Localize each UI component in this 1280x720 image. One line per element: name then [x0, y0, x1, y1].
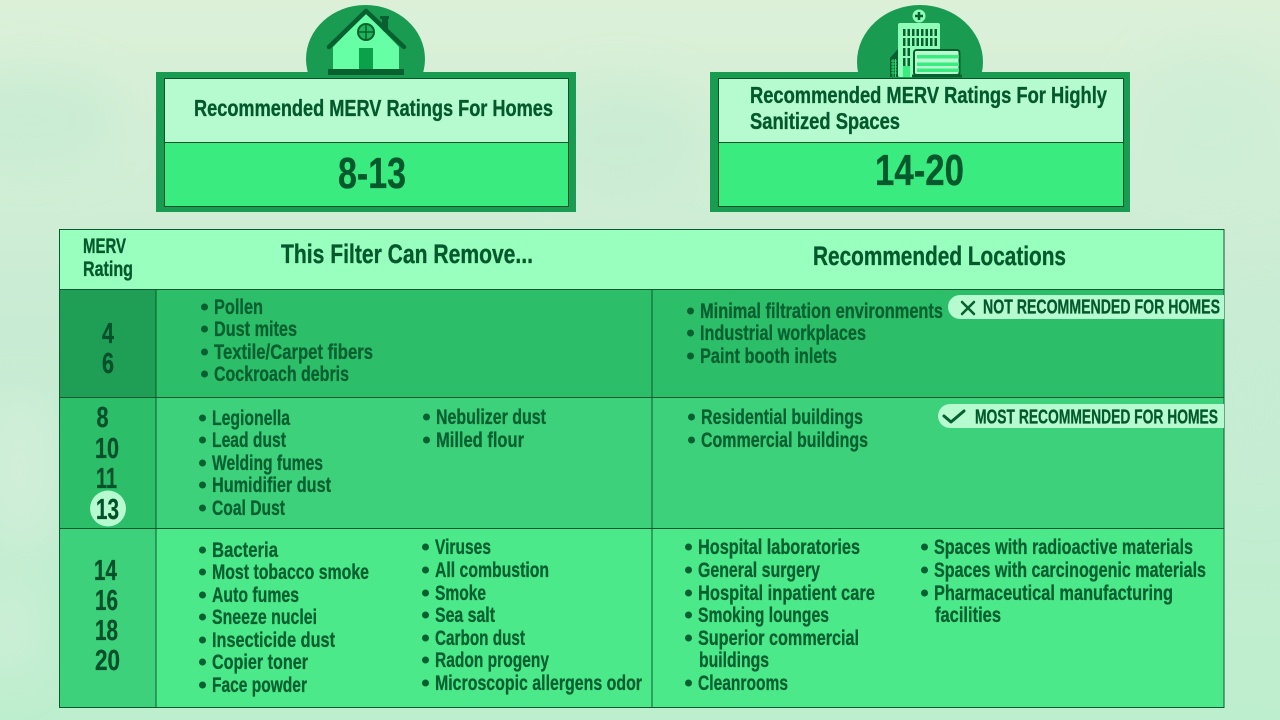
icon: check mark [944, 411, 964, 422]
list: row 3 locations: facilities [935, 603, 1001, 627]
list: row 1 contaminants: Cockroach debris [214, 362, 349, 386]
list: row 3 contaminants: Sneeze nuclei [212, 605, 317, 629]
list: row 2 locations [688, 405, 868, 452]
list: row 3 contaminants: Smoke [435, 581, 486, 605]
list: row 2 contaminants: Coal Dust [212, 496, 285, 520]
list: row 3 locations [685, 535, 1206, 695]
list: row 2 contaminants: Humidifier dust [212, 473, 331, 497]
card heading: sanitized spaces: Sanitized Spaces [750, 108, 900, 134]
list: row 3 locations: Spaces with radioactive materials [934, 535, 1193, 559]
MERV ratings: 8 to 13 [90, 402, 126, 526]
list: row 1 locations: Industrial workplaces [700, 321, 866, 345]
highlight: 13 circle [90, 490, 126, 526]
card heading: homes: Recommended MERV Ratings For Homes [194, 95, 553, 121]
column heading: filter removes: This Filter Can Remove... [281, 239, 533, 269]
list: row 3 contaminants: Sea salt [435, 603, 495, 627]
MERV ratings: 14 to 20: 14 [94, 555, 117, 587]
list: row 3 contaminants: Copier toner [212, 650, 308, 674]
icon: hospital [857, 5, 983, 78]
list: row 3 locations: Hospital laboratories [698, 535, 860, 559]
list: row 2 contaminants: Legionella [212, 406, 291, 430]
column heading: MERV rating: MERV [83, 235, 126, 258]
list: row 1 contaminants: Textile/Carpet fibers [214, 340, 373, 364]
MERV ratings: 14 to 20: 18 [95, 615, 118, 647]
list: row 3 contaminants: Carbon dust [435, 626, 525, 650]
list: row 2 contaminants: Lead dust [212, 428, 286, 452]
list: row 2 contaminants: Nebulizer dust [436, 405, 546, 429]
list: row 3 locations: Pharmaceutical manufacturing [934, 581, 1173, 605]
list: row 3 contaminants: Most tobacco smoke [212, 560, 369, 584]
panel: highly sanitized spaces rating card [710, 72, 1130, 212]
column heading: MERV rating [83, 235, 133, 281]
list: row 2 contaminants: Welding fumes [212, 451, 323, 475]
list: row 3 locations: General surgery [698, 558, 820, 582]
list: row 3 contaminants: Insecticide dust [212, 628, 335, 652]
column heading: recommended locations: Recommended Locations [813, 241, 1066, 271]
list: row 3 locations: buildings [699, 648, 769, 672]
MERV ratings: 14 to 20 [94, 555, 120, 677]
list: row 3 contaminants: Microscopic allergens odor [435, 671, 642, 695]
MERV ratings: 4 and 6 [102, 318, 114, 380]
list: row 1 contaminants: Dust mites [214, 317, 297, 341]
list: row 3 contaminants [199, 535, 642, 697]
list: row 3 contaminants: Radon progeny [435, 648, 549, 672]
icon: cross [962, 302, 974, 314]
list: row 3 contaminants: Face powder [212, 673, 307, 697]
panel: homes rating card [156, 72, 576, 212]
list: row 2 contaminants: Milled flour [436, 428, 524, 452]
row backgrounds [60, 290, 1224, 708]
card heading: sanitized spaces: Recommended MERV Ratings For Highly [750, 82, 1107, 108]
MERV ratings: 8 to 13: 11 [96, 463, 117, 495]
rating range: homes: 8-13 [338, 149, 406, 198]
list: row 2 contaminants [199, 405, 546, 520]
list: row 1 locations: Paint booth inlets [700, 344, 837, 368]
list: row 3 contaminants: Viruses [435, 535, 491, 559]
MERV ratings: 8 to 13: 13 [96, 494, 119, 526]
list: row 1 contaminants: Pollen [214, 295, 263, 319]
list: row 3 locations: Smoking lounges [698, 603, 829, 627]
MERV ratings: 4 and 6: 4 [102, 318, 114, 350]
list: row 2 locations: Commercial buildings [701, 428, 868, 452]
table: MERV ratings [60, 230, 1224, 708]
MERV ratings: 14 to 20: 20 [95, 645, 120, 677]
icon: house [306, 5, 425, 75]
list: row 3 contaminants: Bacteria [212, 538, 279, 562]
list: row 3 locations: Hospital inpatient care [698, 581, 875, 605]
list: row 1 locations [687, 299, 943, 368]
list: row 1 contaminants [201, 295, 373, 386]
MERV ratings: 14 to 20: 16 [95, 585, 118, 617]
list: row 2 locations: Residential buildings [701, 405, 863, 429]
column heading: MERV rating: Rating [83, 258, 133, 281]
card heading: sanitized spaces [750, 82, 1107, 134]
MERV ratings: 8 to 13: 10 [95, 433, 119, 465]
list: row 3 locations: Superior commercial [698, 626, 859, 650]
list: row 3 contaminants: Auto fumes [212, 583, 299, 607]
table header row [60, 230, 1224, 290]
list: row 1 locations: Minimal filtration environments [700, 299, 943, 323]
table grid lines [60, 230, 1224, 708]
callout: not recommended for homes [948, 295, 1224, 319]
list: row 3 contaminants: All combustion [435, 558, 549, 582]
MERV ratings: 8 to 13: 8 [96, 402, 108, 434]
callout: most recommended for homes [938, 404, 1224, 428]
rating range: sanitized spaces: 14-20 [875, 146, 964, 195]
list: row 3 locations: Cleanrooms [698, 671, 788, 695]
MERV ratings: 4 and 6: 6 [102, 348, 114, 380]
